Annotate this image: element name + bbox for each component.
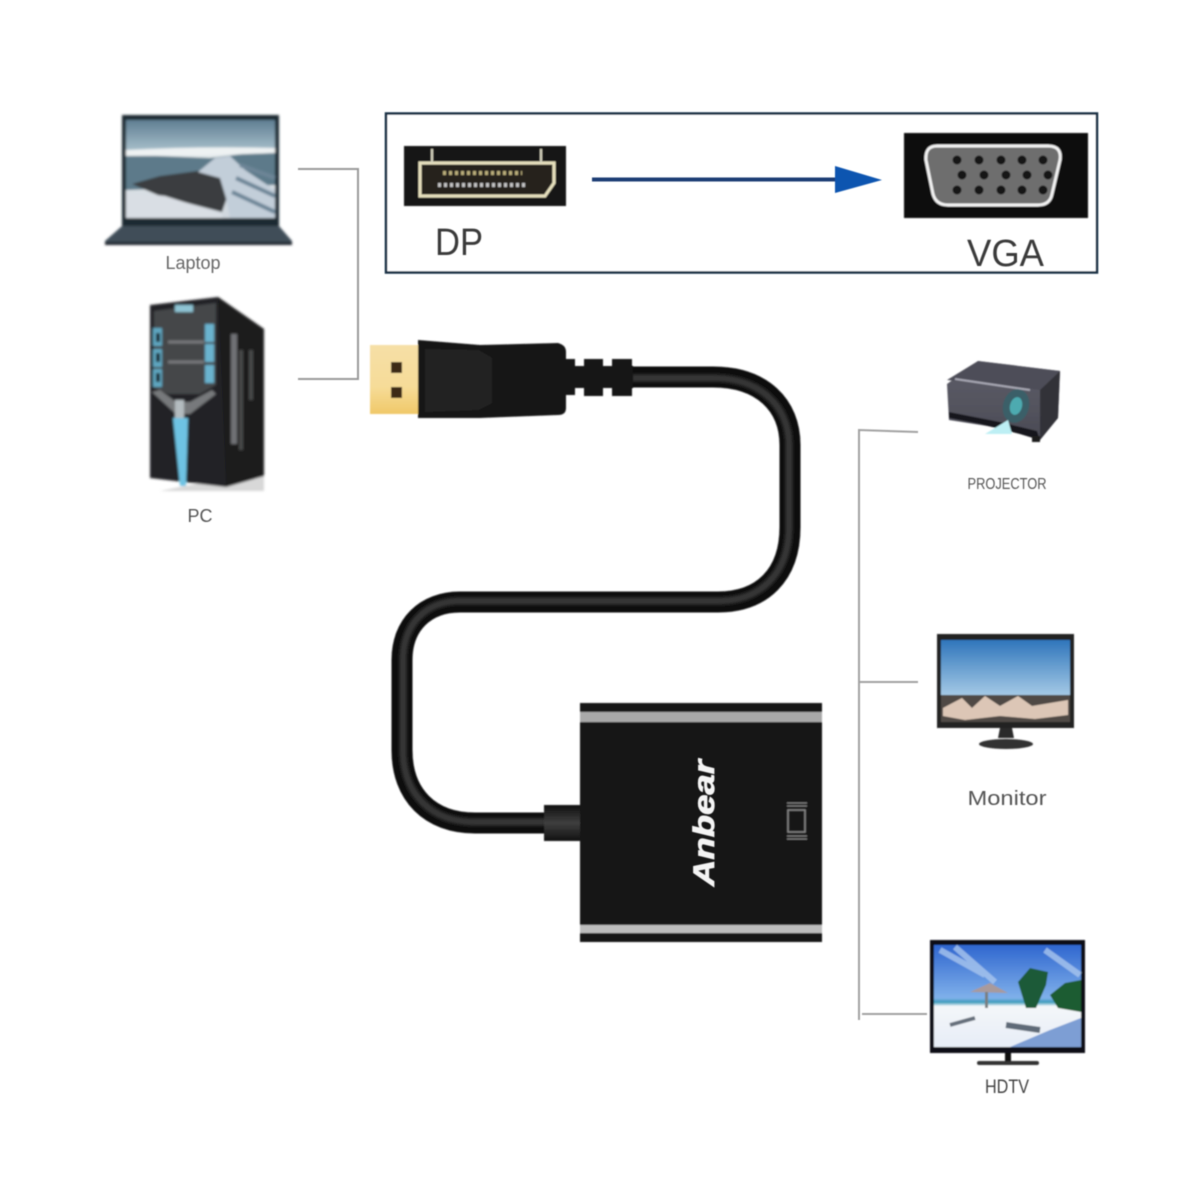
icon: projector <box>947 361 1060 442</box>
icon: PC tower <box>150 297 264 491</box>
brand: Anbear: Anbear <box>688 757 721 887</box>
adapter: cable collar <box>544 805 582 841</box>
adapter: VGA port icon <box>787 803 807 839</box>
panel: DP to VGA conversion <box>386 114 1097 275</box>
connector lines: adapter to displays <box>859 430 927 1020</box>
plug: black housing <box>418 340 566 418</box>
label: Laptop: Laptop <box>165 253 221 273</box>
label: PROJECTOR: PROJECTOR <box>968 476 1046 493</box>
DisplayPort plug <box>370 340 633 418</box>
icon: monitor <box>937 634 1074 749</box>
icon: DisplayPort socket <box>404 146 566 206</box>
arrow: DP to VGA <box>592 166 882 193</box>
panel border <box>386 114 1097 272</box>
icon: VGA socket <box>904 133 1088 218</box>
connector lines: laptop and PC to plug <box>298 169 358 379</box>
label: PC: PC <box>187 506 213 526</box>
label: VGA: VGA <box>967 233 1045 275</box>
adapter body <box>544 703 822 942</box>
cable <box>402 377 790 823</box>
label: HDTV: HDTV <box>985 1077 1029 1098</box>
label: Monitor: Monitor <box>968 788 1047 810</box>
plug: gold contacts <box>370 345 418 414</box>
icon: HDTV <box>930 940 1085 1065</box>
label: DP: DP <box>435 222 483 264</box>
plug: strain relief <box>565 359 633 396</box>
icon: laptop <box>105 115 292 245</box>
